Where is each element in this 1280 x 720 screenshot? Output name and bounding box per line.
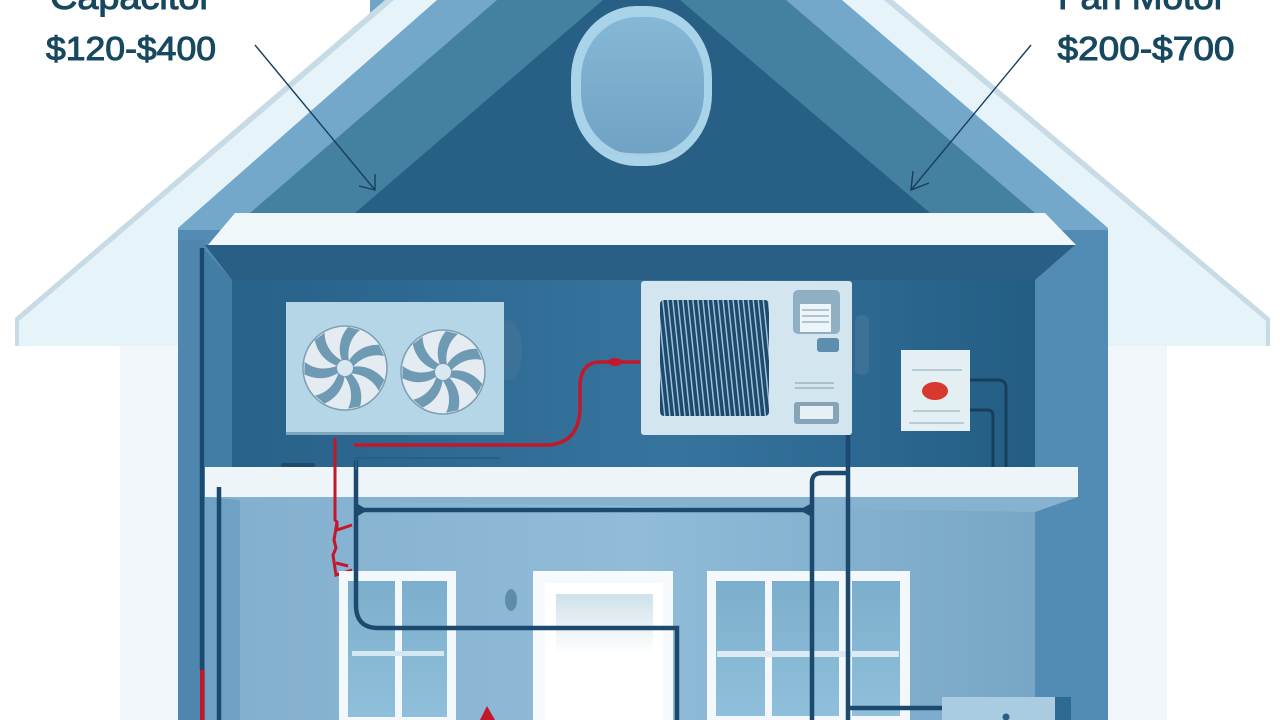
arrow: capacitor pointer [255, 45, 375, 190]
display readout [794, 383, 839, 424]
icon: indoor air handler [641, 281, 869, 435]
red refrigerant line [333, 358, 640, 575]
window left [339, 571, 456, 720]
callout: capacitor [46, 0, 216, 67]
window right [707, 571, 910, 720]
door [533, 571, 673, 720]
main coolant pipes [202, 248, 945, 720]
icon: condenser fan right [400, 330, 485, 415]
wall hook [505, 589, 517, 611]
control button [817, 338, 839, 352]
icon: outdoor condenser unit [286, 302, 522, 435]
red arrow tip [480, 706, 495, 720]
panel: house body [178, 230, 1108, 720]
callout: capacitor: $120-$400 [46, 30, 216, 67]
callout: fan motor [1058, 0, 1234, 67]
icon: furnace unit [942, 697, 1071, 720]
louvered grille [660, 300, 769, 416]
panel: roof blue band [178, 0, 1108, 300]
arrow: fan motor pointer [911, 45, 1031, 190]
callout: fan motor: $200-$700 [1058, 30, 1234, 67]
mid floor shelf [205, 467, 1078, 497]
panel: attic gable [355, 0, 930, 213]
pipe joints [356, 503, 812, 517]
icon: condenser fan left [302, 326, 387, 411]
chimney stub [370, 0, 400, 20]
panel: lower room [205, 490, 1078, 720]
panel: upper room [205, 245, 1075, 467]
control panel screen [793, 290, 840, 334]
red section of left pipe [200, 670, 204, 720]
icon: disconnect switch box [901, 350, 970, 431]
dark wires from switch [970, 380, 1006, 467]
panel: windows and door [339, 571, 910, 720]
attic floor slab [208, 213, 1076, 245]
panel: roof outer band [15, 0, 1270, 346]
panel: roof inner shade [250, 0, 1035, 213]
panel: house side walls [120, 340, 1167, 720]
small shelf bracket [281, 463, 315, 467]
icon: attic vent window [571, 6, 712, 166]
